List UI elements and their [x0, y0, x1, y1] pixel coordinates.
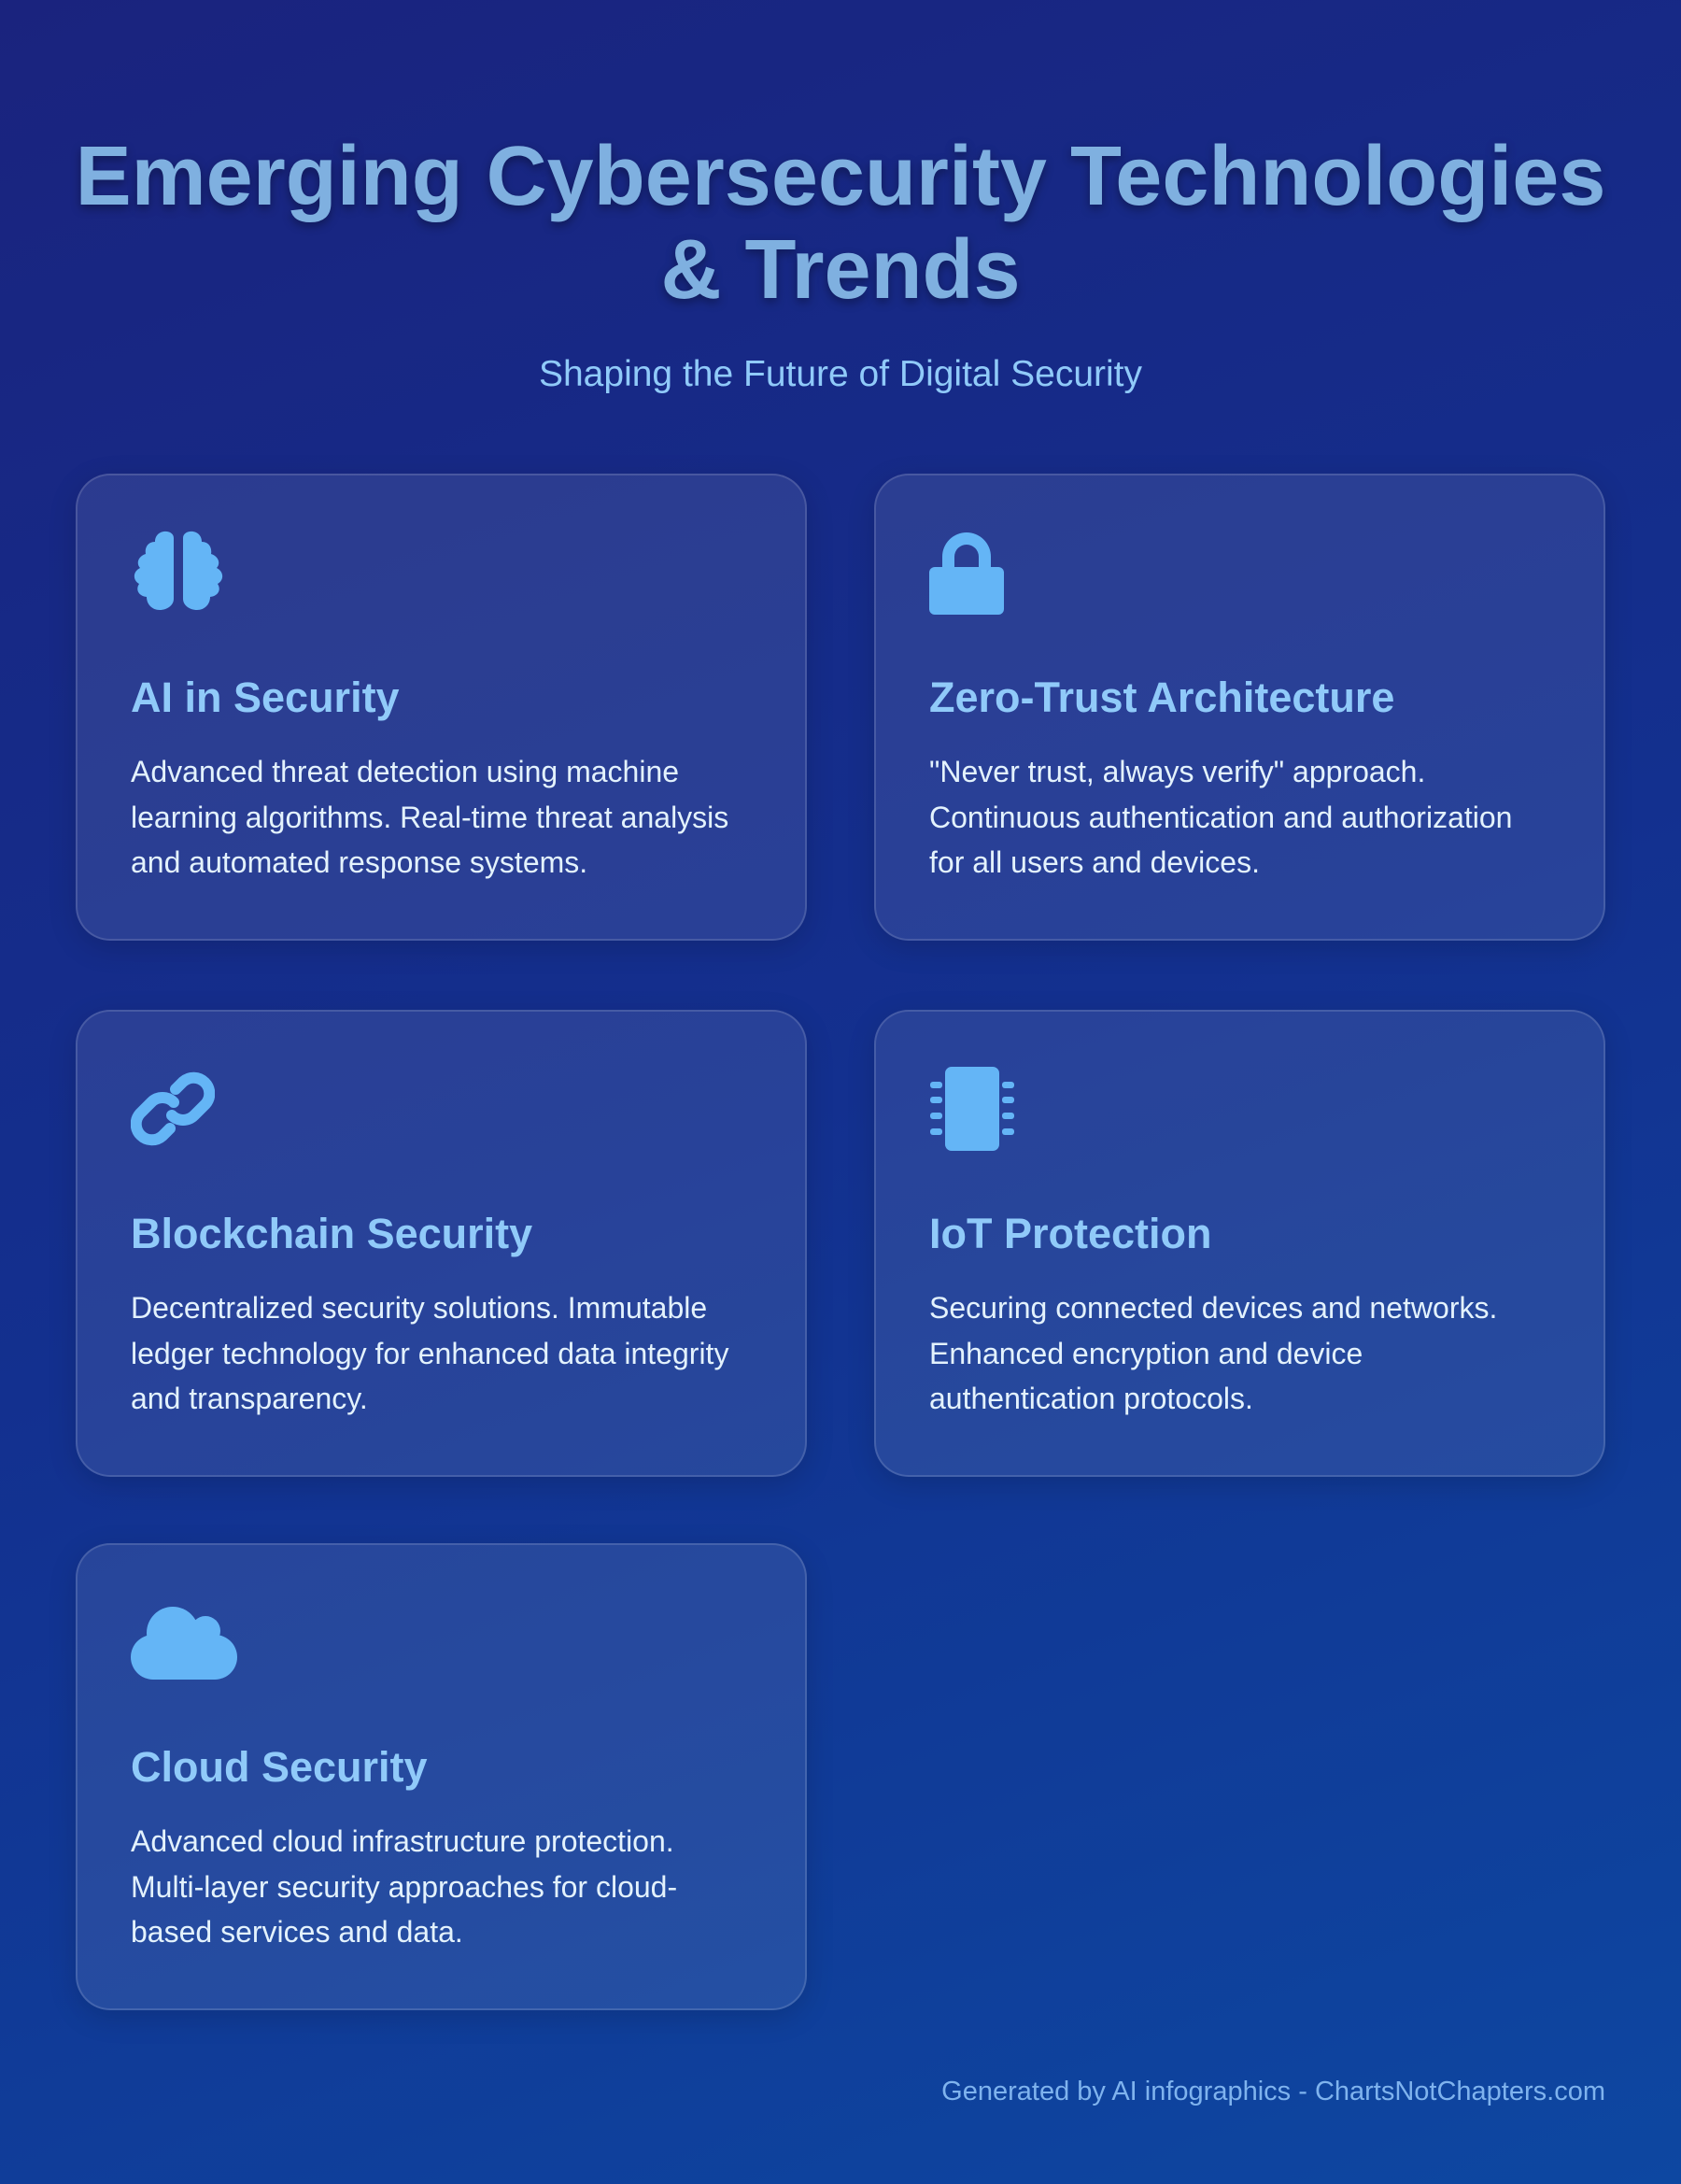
title: & Trends — [660, 223, 1021, 317]
icon: link — [131, 1072, 215, 1145]
panel: Cloud — [76, 1543, 807, 2010]
text: Advanced cloud infrastructure protection. Multi-layer security approaches for cloud-based services and data. — [131, 1824, 677, 1949]
text: Securing connected devices and networks. Enhanced encryption and device authentication protocols. — [929, 1291, 1497, 1415]
heading: Cloud Security — [131, 1743, 428, 1791]
panel: Zero-Trust — [874, 474, 1605, 941]
heading: IoT Protection — [929, 1210, 1212, 1257]
panel: IoT — [874, 1010, 1605, 1477]
panel: Blockchain — [76, 1010, 807, 1477]
heading: Zero-Trust Architecture — [929, 674, 1394, 721]
heading: AI in Security — [131, 674, 400, 721]
icon: brain — [134, 531, 222, 610]
text: "Never trust, always verify" approach. Continuous authentication and authorization for all users and devices. — [929, 755, 1512, 879]
footer: Generated by AI infographics - ChartsNotChapters.com — [941, 2077, 1605, 2106]
heading: Blockchain Security — [131, 1210, 532, 1257]
icon: microchip — [930, 1067, 1014, 1151]
subtitle: Shaping the Future of Digital Security — [539, 354, 1142, 394]
icon: lock — [929, 532, 1004, 615]
text: Decentralized security solutions. Immutable ledger technology for enhanced data integrity and transparency. — [131, 1291, 728, 1415]
icon: cloud — [131, 1607, 237, 1680]
title: Emerging Cybersecurity Technologies — [76, 130, 1605, 223]
panel: AI in Security — [76, 474, 807, 941]
text: Advanced threat detection using machine learning algorithms. Real-time threat analysis and automated response systems. — [131, 755, 728, 879]
title — [76, 130, 1606, 317]
